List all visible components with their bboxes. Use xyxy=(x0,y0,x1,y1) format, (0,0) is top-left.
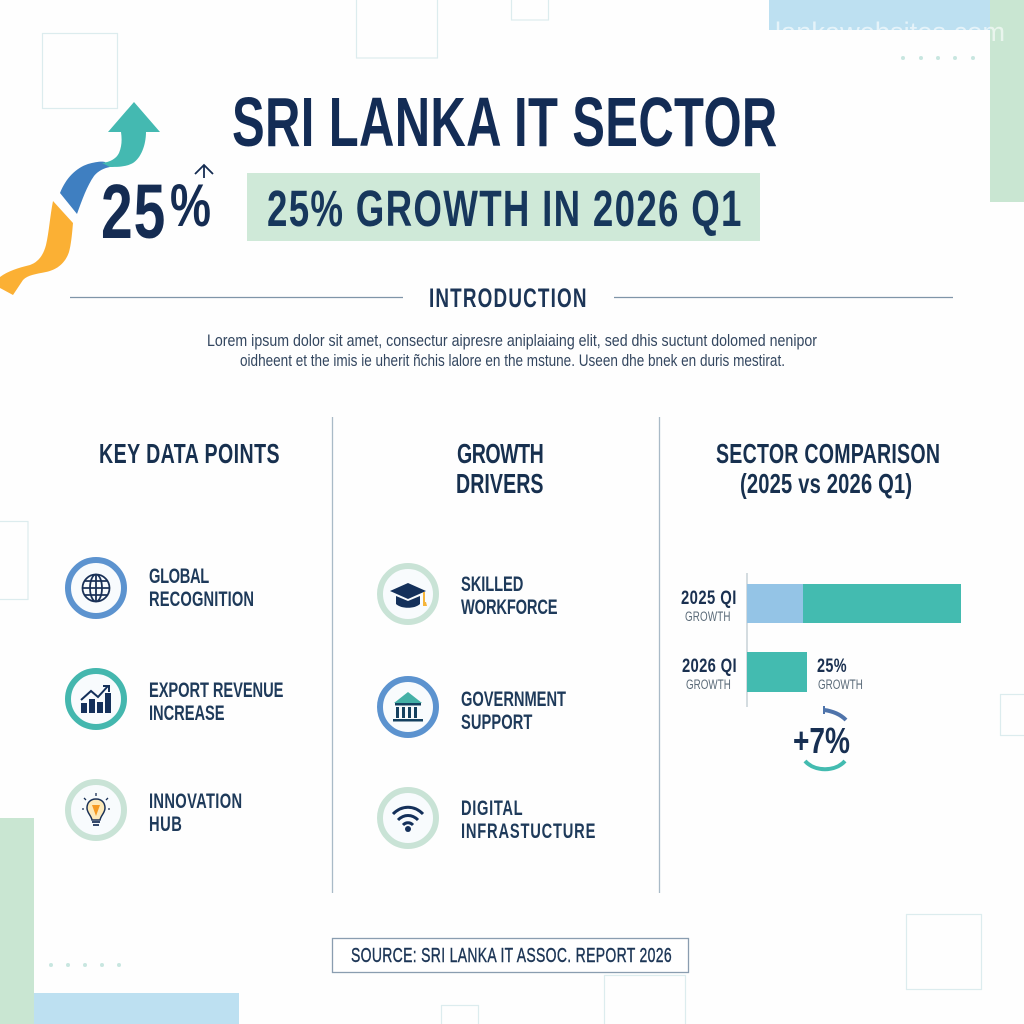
bar chart: 2026 QI xyxy=(682,655,737,676)
item: government support xyxy=(380,679,566,735)
bar chart xyxy=(681,573,961,707)
item: digital infrastructure: DIGITAL xyxy=(461,796,523,820)
item: skilled workforce: SKILLED xyxy=(461,572,523,596)
heading: key data points: KEY DATA POINTS xyxy=(99,439,280,470)
item: government support: GOVERNMENT xyxy=(461,687,566,711)
panel: growth drivers xyxy=(380,439,595,846)
title: SRI LANKA IT SECTOR xyxy=(232,82,777,161)
item: export revenue increase: EXPORT REVENUE xyxy=(149,678,283,702)
big figure: 25%: 25 xyxy=(101,170,165,255)
panel: sector comparison xyxy=(681,439,961,769)
big figure: 25% xyxy=(101,165,213,255)
icon: growth arrow xyxy=(0,102,160,295)
big figure: 25%: % xyxy=(170,172,211,239)
callout: +7% xyxy=(793,706,850,769)
introduction heading: INTRODUCTION xyxy=(429,283,586,313)
bar chart: GROWTH xyxy=(818,676,863,692)
item: skilled workforce: WORKFORCE xyxy=(461,595,558,619)
item: export revenue increase xyxy=(68,671,283,727)
item: skilled workforce xyxy=(380,566,558,622)
item: government support: SUPPORT xyxy=(461,710,532,734)
item: innovation hub: INNOVATION xyxy=(149,789,242,813)
decorative background shapes: lankawebsites.com xyxy=(775,17,1005,47)
heading: sector comparison xyxy=(716,439,940,500)
bar chart: 25% xyxy=(817,655,847,677)
item: export revenue increase: INCREASE xyxy=(149,701,225,725)
panel: key data points xyxy=(68,439,283,838)
item: digital infrastructure xyxy=(380,790,595,846)
column dividers xyxy=(332,417,660,893)
introduction text xyxy=(207,331,817,370)
subtitle banner: 25% GROWTH IN 2026 Q1 xyxy=(267,181,741,237)
item: innovation hub: HUB xyxy=(149,812,182,836)
item: global recognition xyxy=(68,560,254,616)
heading: growth drivers: DRIVERS xyxy=(456,469,543,500)
heading: growth drivers xyxy=(456,439,544,500)
item: global recognition: GLOBAL xyxy=(149,564,209,588)
source box: SOURCE: SRI LANKA IT ASSOC. REPORT 2026 xyxy=(351,943,672,967)
item: innovation hub xyxy=(68,782,242,838)
heading: growth drivers: GROWTH xyxy=(457,439,544,470)
item: digital infrastructure: INFRASTUCTURE xyxy=(461,819,595,843)
bar chart: 2025 QI xyxy=(681,587,736,608)
callout: +7%: +7% xyxy=(793,721,850,761)
bar chart: GROWTH xyxy=(686,676,731,692)
heading: sector comparison: (2025 vs 2026 Q1) xyxy=(740,469,912,500)
source box xyxy=(332,938,688,972)
item: global recognition: RECOGNITION xyxy=(149,587,254,611)
heading: sector comparison: SECTOR COMPARISON xyxy=(716,439,940,470)
introduction text: oidheent et the imis ie uherit ñchis lalore en the mstune. Useen dhe bnek en duris mestirat. xyxy=(240,351,785,370)
bar chart: GROWTH xyxy=(685,608,730,624)
introduction text: Lorem ipsum dolor sit amet, consectur aipresre aniplaiaing elit, sed dhis suctunt dolomed nenipor xyxy=(207,331,817,350)
